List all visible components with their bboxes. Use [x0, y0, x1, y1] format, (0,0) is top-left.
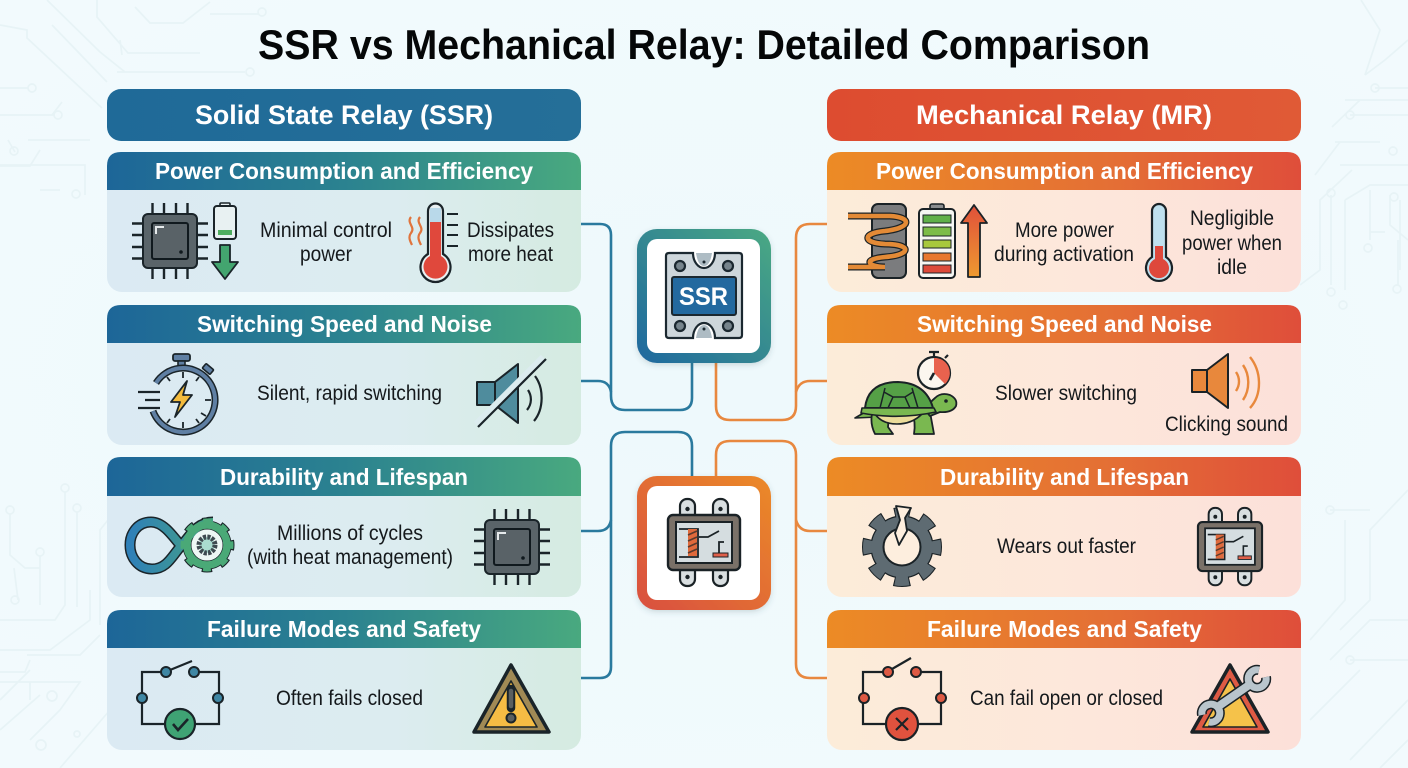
- icon: warning triangle: [474, 665, 549, 732]
- icon: infinity gear: [130, 522, 229, 569]
- text: negligible power when idle: power when: [1182, 232, 1282, 255]
- panel heading: Switching Speed and Noise: [197, 311, 492, 337]
- icon: SSR module: SSR: [679, 283, 728, 311]
- icon: down arrow: [212, 245, 238, 279]
- panel heading: [107, 457, 581, 496]
- panel heading: Power Consumption and Efficiency: [876, 158, 1253, 184]
- icon: speaker: [1192, 354, 1259, 408]
- panel: MR switching speed: [827, 305, 1301, 445]
- icon: relay: [668, 499, 740, 586]
- connectors: SSR side: [581, 224, 692, 678]
- text: silent rapid switching: Silent, rapid switching: [257, 382, 442, 405]
- panel heading: [827, 305, 1301, 343]
- text: wears out faster: Wears out faster: [997, 535, 1136, 558]
- text: slower switching: Slower switching: [995, 382, 1137, 405]
- text: more power during activation: during activation: [994, 243, 1134, 266]
- text: dissipates more heat: more heat: [468, 243, 553, 266]
- text: minimal control power: power: [300, 243, 352, 266]
- header: Mechanical Relay: Mechanical Relay (MR): [916, 100, 1212, 130]
- panel: SSR durability: [107, 457, 581, 597]
- text: millions of cycles: (with heat management): [247, 546, 453, 569]
- panel heading: Power Consumption and Efficiency: [155, 158, 533, 184]
- text: more power during activation: More power: [1015, 219, 1114, 242]
- icon: up arrow: [961, 205, 987, 277]
- text: often fails closed: Often fails closed: [276, 687, 423, 710]
- icon: full battery: [919, 204, 955, 278]
- panel: SSR switching speed: [107, 305, 581, 445]
- icon: chip: [132, 203, 208, 279]
- header: Solid State Relay: Solid State Relay (SSR): [195, 100, 493, 130]
- panel: MR failure modes: [827, 610, 1301, 750]
- panel heading: [827, 152, 1301, 190]
- icon: coil: [848, 204, 906, 278]
- panel heading: [827, 457, 1301, 496]
- icon: chip: [474, 509, 550, 585]
- icon: closed circuit: [137, 661, 223, 739]
- icon: open circuit: [859, 658, 946, 740]
- panel: MR durability: [827, 457, 1301, 597]
- text: minimal control power: Minimal control: [260, 219, 392, 242]
- icon: muted speaker: [476, 357, 546, 427]
- text: clicking sound: Clicking sound: [1165, 413, 1288, 436]
- text: negligible power when idle: idle: [1217, 256, 1247, 279]
- panel heading: Failure Modes and Safety: [927, 616, 1202, 642]
- panel heading: [107, 152, 581, 190]
- text: dissipates more heat: Dissipates: [467, 219, 554, 242]
- panel: MR power consumption: [827, 152, 1301, 292]
- central badge: SSR: [637, 229, 771, 363]
- icon: turtle with stopwatch: [855, 352, 956, 434]
- panel heading: [827, 610, 1301, 648]
- header: Solid State Relay: [107, 89, 581, 141]
- icon: low battery: [214, 203, 236, 239]
- panel: SSR power consumption: [107, 152, 581, 292]
- icon: cool thermometer: [1146, 204, 1172, 281]
- header: Mechanical Relay: [827, 89, 1301, 141]
- text: millions of cycles: Millions of cycles: [277, 522, 423, 545]
- title: SSR vs Mechanical Relay: Detailed Comparison: [258, 21, 1150, 68]
- panel heading: Durability and Lifespan: [220, 464, 468, 490]
- panel heading: [107, 305, 581, 343]
- background circuit pattern: [0, 0, 266, 768]
- panel heading: [107, 610, 581, 648]
- panel heading: Switching Speed and Noise: [917, 311, 1212, 337]
- icon: broken gear: [869, 506, 935, 580]
- icon: warning with wrench: [1192, 665, 1268, 732]
- text: negligible power when idle: Negligible: [1190, 207, 1274, 230]
- panel: SSR failure modes: [107, 610, 581, 750]
- panel heading: Durability and Lifespan: [940, 464, 1189, 490]
- connectors: MR side: [716, 224, 827, 678]
- central badge: mechanical relay: [637, 476, 771, 610]
- background circuit pattern right: [1300, 0, 1408, 768]
- icon: relay: [1198, 508, 1262, 585]
- panel heading: Failure Modes and Safety: [207, 616, 481, 642]
- icon: hot thermometer: [409, 204, 458, 282]
- text: can fail open or closed: Can fail open or closed: [970, 687, 1163, 710]
- icon: stopwatch: [138, 354, 215, 432]
